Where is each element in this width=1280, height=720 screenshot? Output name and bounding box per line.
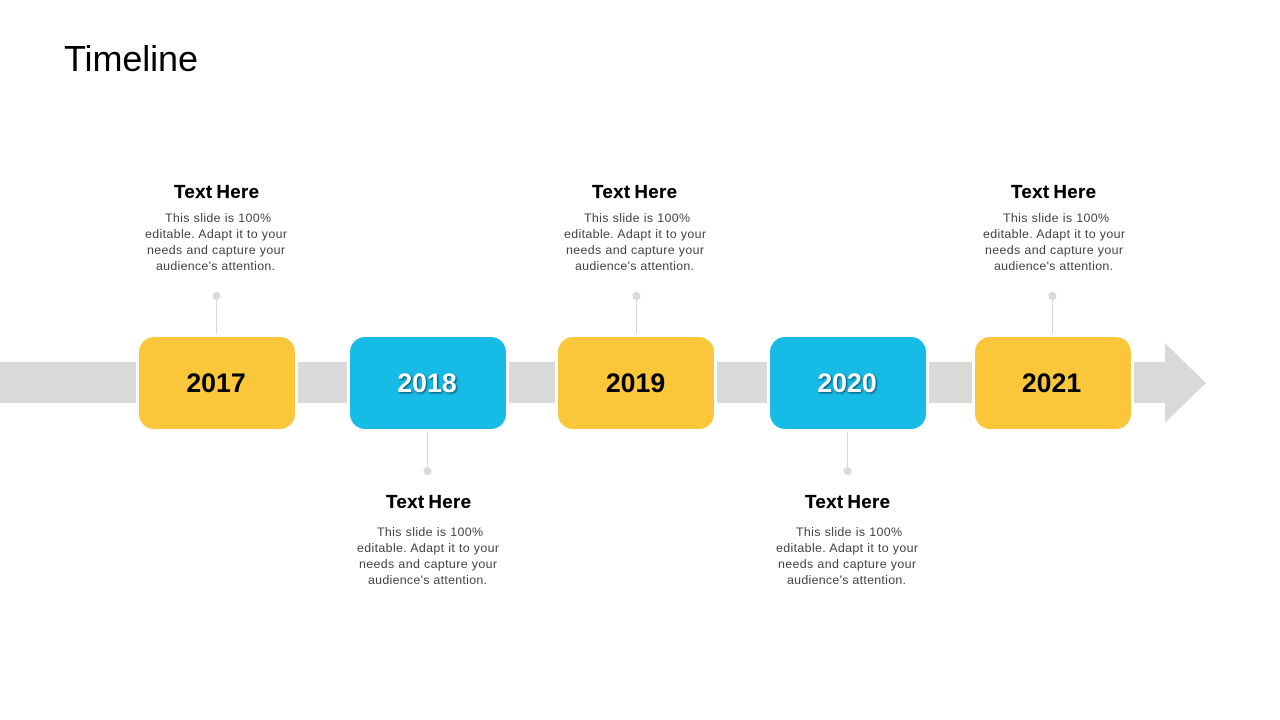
- description 2019: editable. Adapt it to your: [564, 227, 706, 241]
- connector 2018: [424, 432, 432, 475]
- description 2018: audience's attention.: [368, 573, 487, 587]
- year box 2018: [350, 337, 506, 429]
- year 2019: 2019: [606, 368, 665, 398]
- description 2020: needs and capture your: [778, 557, 916, 571]
- year 2021: 2021: [1022, 368, 1081, 398]
- year box 2017: [139, 337, 295, 429]
- description 2021: This slide is 100%: [1003, 211, 1109, 225]
- title: Timeline: [64, 38, 198, 79]
- description 2018: needs and capture your: [359, 557, 497, 571]
- milestone 2020: [770, 337, 926, 587]
- description 2017: This slide is 100%: [165, 211, 271, 225]
- description 2017: needs and capture your: [147, 243, 285, 257]
- connector 2020: [844, 432, 852, 475]
- milestone 2018: [350, 337, 506, 587]
- description 2018: [357, 525, 499, 587]
- description 2021: audience's attention.: [994, 259, 1113, 273]
- description 2021: [983, 211, 1125, 273]
- milestone 2021: [975, 181, 1131, 429]
- year box 2020: [770, 337, 926, 429]
- description 2018: editable. Adapt it to your: [357, 541, 499, 555]
- description 2019: needs and capture your: [566, 243, 704, 257]
- milestone 2017: [139, 181, 295, 429]
- description 2020: [776, 525, 918, 587]
- heading 2020: Text Here: [805, 491, 890, 512]
- year box 2021: [975, 337, 1131, 429]
- heading 2019: Text Here: [592, 181, 677, 202]
- description 2018: This slide is 100%: [377, 525, 483, 539]
- year 2020: 2020: [817, 368, 877, 398]
- year 2018: 2018: [397, 368, 457, 398]
- description 2017: [145, 211, 287, 273]
- description 2019: This slide is 100%: [584, 211, 690, 225]
- heading 2021: Text Here: [1011, 181, 1096, 202]
- connector 2021: [1048, 292, 1056, 334]
- description 2019: [564, 211, 706, 273]
- description 2020: editable. Adapt it to your: [776, 541, 918, 555]
- description 2021: editable. Adapt it to your: [983, 227, 1125, 241]
- description 2020: audience's attention.: [787, 573, 906, 587]
- year box 2019: [558, 337, 714, 429]
- description 2020: This slide is 100%: [796, 525, 902, 539]
- heading 2017: Text Here: [174, 181, 259, 202]
- connector 2019: [632, 292, 640, 334]
- description 2019: audience's attention.: [575, 259, 694, 273]
- description 2017: editable. Adapt it to your: [145, 227, 287, 241]
- heading 2018: Text Here: [386, 491, 471, 512]
- timeline arrow: [0, 343, 1206, 423]
- description 2017: audience's attention.: [156, 259, 275, 273]
- connector 2017: [212, 292, 220, 334]
- description 2021: needs and capture your: [985, 243, 1123, 257]
- milestone 2019: [558, 181, 714, 429]
- year 2017: 2017: [186, 368, 246, 398]
